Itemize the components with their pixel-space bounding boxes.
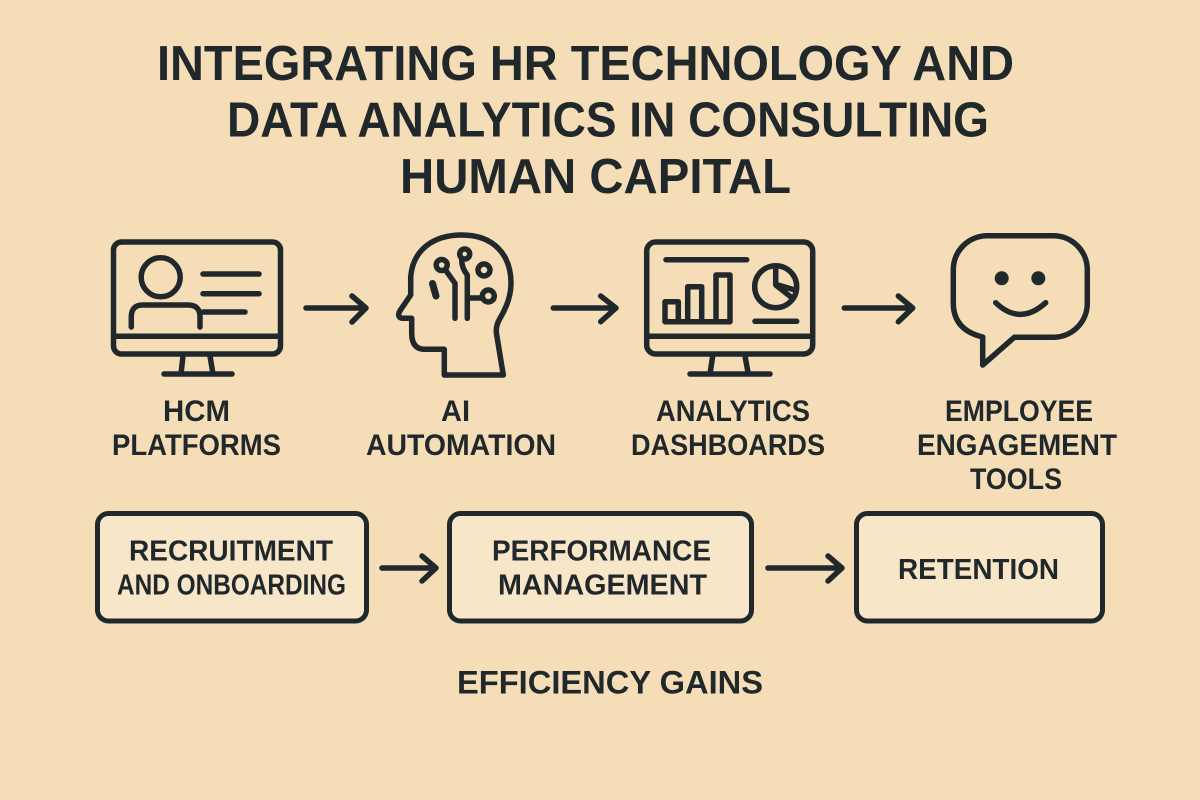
caption: efficiency gains: EFFICIENCY GAINS <box>457 664 763 700</box>
label: employee engagement tools: ENGAGEMENT <box>917 429 1117 462</box>
label: employee engagement tools <box>917 395 1117 496</box>
arrow: performance to retention <box>768 556 842 581</box>
label: AI automation <box>366 395 556 462</box>
icon: HCM monitor with user profile <box>114 242 280 374</box>
label: AI automation: AUTOMATION <box>366 429 556 462</box>
panel: performance management: PERFORMANCE <box>492 536 711 568</box>
label: employee engagement tools: EMPLOYEE <box>945 395 1093 428</box>
label: analytics dashboards: ANALYTICS <box>656 395 810 428</box>
label: HCM platforms <box>112 395 281 462</box>
panel: retention <box>856 514 1102 621</box>
label: HCM platforms: HCM <box>163 395 230 428</box>
arrow: HCM to AI <box>306 296 366 322</box>
arrow: analytics to engagement <box>844 296 913 322</box>
arrow: AI to analytics <box>553 296 616 322</box>
panel: recruitment and onboarding <box>98 514 366 621</box>
title <box>157 37 1014 204</box>
panel: retention: RETENTION <box>898 554 1059 586</box>
icon: AI head with circuits <box>399 235 511 375</box>
panel: performance management <box>450 514 752 621</box>
label: analytics dashboards <box>631 395 825 462</box>
icon: analytics dashboard monitor <box>647 242 813 374</box>
icon: smiling speech bubble <box>953 236 1087 365</box>
label: employee engagement tools: TOOLS <box>970 463 1062 496</box>
panel: recruitment and onboarding: RECRUITMENT <box>129 536 333 568</box>
arrow: recruitment to performance <box>382 556 436 581</box>
title: DATA ANALYTICS IN CONSULTING <box>227 94 989 148</box>
label: HCM platforms: PLATFORMS <box>112 429 281 462</box>
panel: performance management: MANAGEMENT <box>498 570 707 602</box>
panel: recruitment and onboarding: AND ONBOARDING <box>117 570 346 602</box>
label: AI automation: AI <box>441 395 470 428</box>
title: HUMAN CAPITAL <box>400 150 791 204</box>
title: INTEGRATING HR TECHNOLOGY AND <box>157 37 1014 91</box>
label: analytics dashboards: DASHBOARDS <box>631 429 825 462</box>
